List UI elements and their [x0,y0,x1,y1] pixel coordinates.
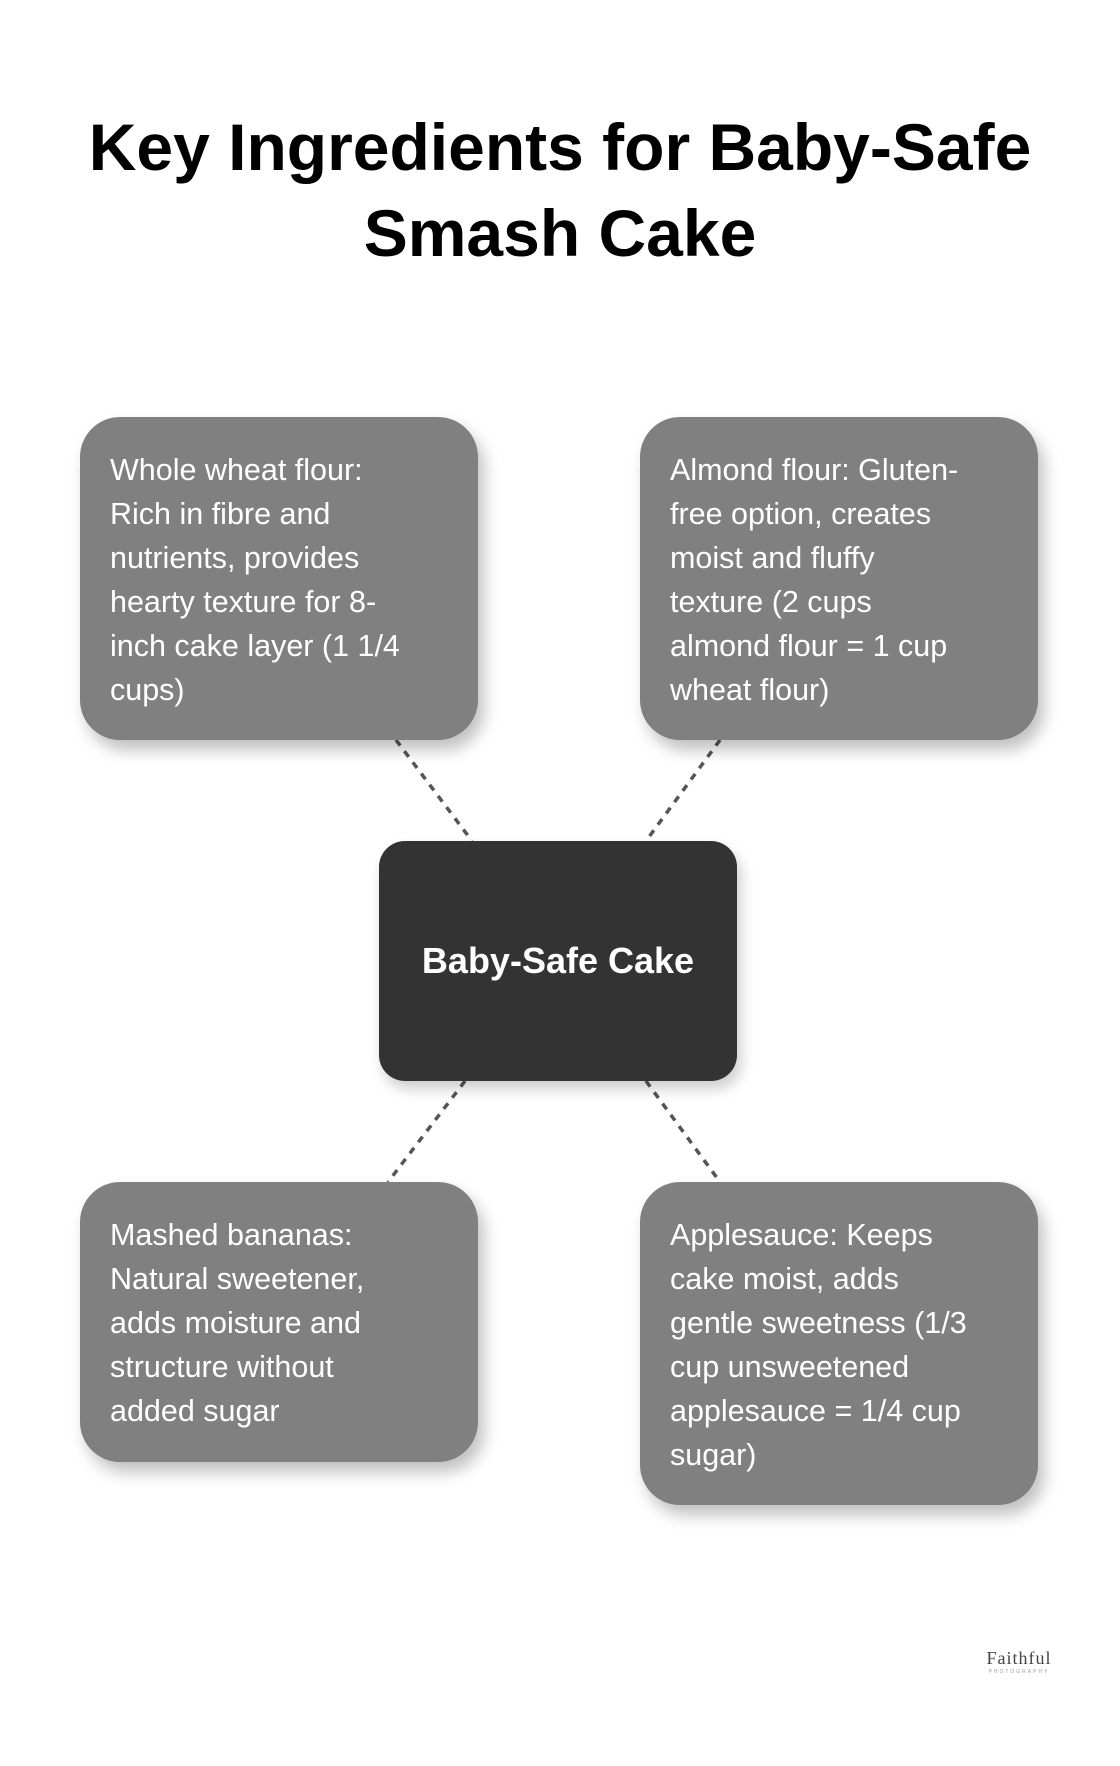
panel: almond flour [640,417,1038,740]
panel: mashed bananas: structure without [110,1350,334,1384]
title: Smash Cake [364,196,756,270]
panel: mashed bananas [80,1182,478,1462]
panel: applesauce: cup unsweetened [670,1350,909,1384]
logo: Faithful [986,1648,1052,1668]
panel: mashed bananas: added sugar [110,1394,280,1428]
center node: Baby-Safe Cake [422,940,694,981]
panel: almond flour: wheat flour) [670,673,829,707]
panel: applesauce: Applesauce: Keeps [670,1218,933,1252]
panel: mashed bananas: adds moisture and [110,1306,361,1340]
panel: almond flour: almond flour = 1 cup [670,629,947,663]
panel: mashed bananas: Natural sweetener, [110,1262,364,1296]
title [89,110,1031,270]
panel: applesauce [640,1182,1038,1505]
panel: whole wheat flour: nutrients, provides [110,541,359,575]
panel: applesauce: cake moist, adds [670,1262,899,1296]
panel: almond flour: moist and fluffy [670,541,875,575]
center node [379,841,737,1081]
panel: almond flour: free option, creates [670,497,931,531]
panel: whole wheat flour: hearty texture for 8- [110,585,376,619]
panel: applesauce: sugar) [670,1438,756,1472]
panel: applesauce: applesauce = 1/4 cup [670,1394,961,1428]
panel: whole wheat flour: Rich in fibre and [110,497,330,531]
panel: applesauce: gentle sweetness (1/3 [670,1306,967,1340]
panel: almond flour: Almond flour: Gluten- [670,453,958,487]
title: Key Ingredients for Baby-Safe [89,110,1031,184]
panel: whole wheat flour: cups) [110,673,185,707]
panel: whole wheat flour [80,417,478,740]
panel: mashed bananas: Mashed bananas: [110,1218,352,1252]
panel: whole wheat flour: Whole wheat flour: [110,453,363,487]
logo: PHOTOGRAPHY [989,1669,1049,1675]
panel: whole wheat flour: inch cake layer (1 1/4 [110,629,400,663]
panel: almond flour: texture (2 cups [670,585,872,619]
